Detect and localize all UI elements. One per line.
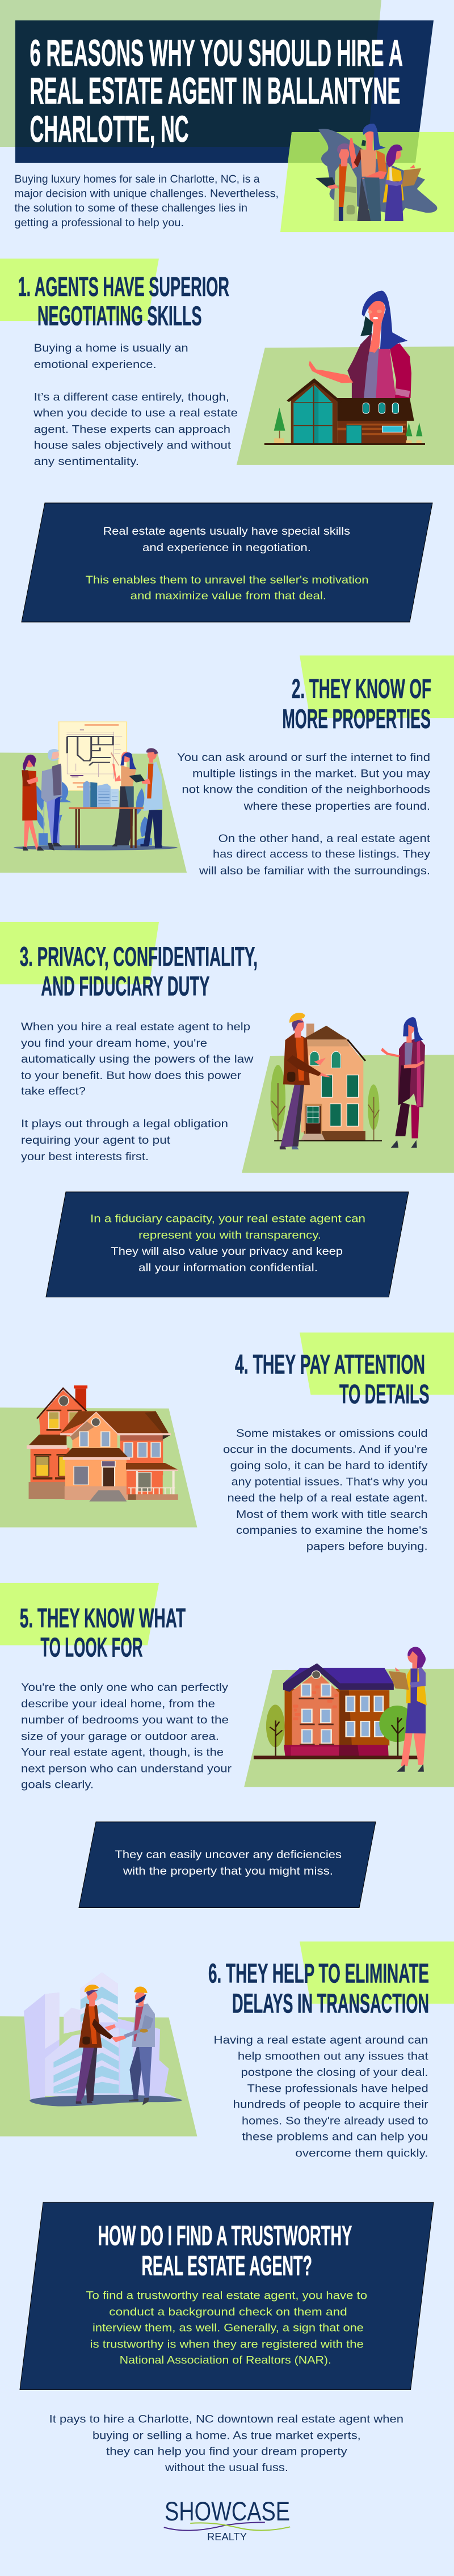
blueprint poster	[59, 722, 127, 790]
callout: section 3: represent you with transparency.	[138, 1229, 321, 1242]
panel: section 6 heading tab	[300, 1941, 454, 2004]
text block: section 3: It plays out through a legal obligation	[21, 1118, 228, 1130]
text block: section 4: Most of them work with title search	[236, 1508, 428, 1521]
callout: section 1: and maximize value from that deal.	[131, 590, 326, 602]
callout: section 5: with the property that you might miss.	[123, 1865, 333, 1877]
text block: section 3: take effect?	[21, 1085, 86, 1098]
illustration: agent with house, section 1	[237, 291, 454, 465]
text block: section 4: going solo, it can be hard to identify	[230, 1460, 428, 1472]
left man	[76, 1985, 116, 2104]
text block: section 2: On the other hand, a real estate agent	[218, 832, 431, 845]
illustration: team reviewing blueprint	[0, 722, 187, 873]
text block: final answer: To find a trustworthy real estate agent, you have to	[86, 2290, 367, 2302]
text block: closing	[49, 2413, 403, 2474]
logo: Showcase Realty: REALTY	[207, 2531, 247, 2543]
text block: closing: It pays to hire a Charlotte, NC downtown real estate agent when	[49, 2413, 403, 2425]
panel: section 3 heading tab	[0, 922, 159, 984]
text block: closing: buying or selling a home. As true market experts,	[93, 2429, 361, 2442]
text block: section 2	[177, 751, 431, 877]
text block: section 4: any potential issues. That's why you	[232, 1476, 428, 1488]
text block: section 6: overcome them quickly.	[295, 2147, 428, 2160]
text block: section 2: multiple listings in the market. But you may	[192, 768, 430, 780]
text block: intro: Buying luxury homes for sale in Charlotte, NC, is a	[15, 173, 260, 185]
text block: section 6: Having a real estate agent around can	[213, 2034, 428, 2046]
heading: section 2	[282, 674, 431, 734]
text block: section 2: where these properties are found.	[243, 800, 430, 813]
text block: section 2: has direct access to these listings. They	[213, 848, 430, 861]
text block: section 6: postpone the closing of your deal.	[241, 2066, 428, 2079]
man	[280, 1013, 331, 1149]
text block: final answer	[86, 2290, 367, 2366]
text block: section 5: goals clearly.	[21, 1778, 94, 1791]
text block: section 1: It’s a different case entirely, though,	[34, 391, 229, 404]
text block: section 1: house sales objectively and without	[34, 439, 232, 452]
text block: section 5: size of your garage or outdoor area.	[21, 1730, 219, 1742]
text block: section 3: you find your dream home, you're	[21, 1037, 207, 1050]
text block: section 1: Buying a home is usually an	[34, 342, 188, 354]
callout: section 5	[79, 1822, 376, 1907]
woman	[381, 1017, 425, 1148]
man in lab coat	[129, 748, 163, 848]
callout: section 1: Real estate agents usually have special skills	[103, 525, 350, 538]
text block: section 3: automatically using the powers of the law	[21, 1053, 254, 1065]
right woman	[382, 145, 421, 221]
heading: how do I find a trustworthy agent	[98, 2221, 352, 2282]
text block: section 1: emotional experience.	[34, 358, 157, 371]
text block: intro	[15, 173, 279, 229]
text block: section 6: homes. So they're already used to	[242, 2115, 428, 2127]
woman	[389, 1647, 427, 1772]
heading: section 5	[20, 1604, 186, 1663]
text block: intro: major decision with unique challenges. Nevertheless,	[15, 187, 279, 200]
left woman	[316, 138, 358, 221]
text block: section 1: agent. These experts can approach	[34, 423, 230, 435]
model buildings	[83, 781, 119, 807]
illustration: agent, client and house, section 3	[242, 1013, 454, 1173]
text block: final answer: National Association of Realtors (NAR).	[120, 2354, 331, 2366]
house	[274, 1023, 382, 1141]
right man	[111, 1987, 155, 2105]
text block: section 3: requiring your agent to put	[21, 1134, 171, 1147]
text block: section 3: your best interests first.	[21, 1150, 149, 1163]
left tree	[266, 1704, 285, 1756]
callout: section 1: This enables them to unravel the seller's motivation	[85, 574, 369, 586]
text block: section 5: number of bedrooms you want to the	[21, 1714, 229, 1726]
heading: section 3	[20, 942, 258, 1002]
text block: section 5: next person who can understand your	[21, 1762, 232, 1775]
panel: section 4 heading tab	[300, 1333, 454, 1395]
trees	[271, 1065, 379, 1140]
woman with pointer	[111, 752, 137, 847]
text block: section 3: to your benefit. But how does this power	[21, 1069, 242, 1082]
text block: intro: the solution to some of these challenges lies in	[15, 202, 247, 214]
callout: section 1	[22, 503, 432, 622]
text block: closing: without the usual fuss.	[165, 2461, 288, 2474]
illustration: three agents	[316, 124, 437, 221]
table	[69, 807, 144, 848]
text block: section 1: when you decide to use a real estate	[33, 407, 238, 419]
text block: section 1	[33, 342, 238, 468]
woman	[309, 291, 411, 399]
text block: section 6: These professionals have helped	[247, 2083, 428, 2095]
title	[30, 32, 403, 150]
text block: section 3: When you hire a real estate agent to help	[21, 1021, 250, 1033]
text block: section 2: You can ask around or surf the internet to find	[177, 751, 430, 764]
heading: section 3: AND FIDUCIARY DUTY	[41, 972, 209, 1002]
heading: section 1: 1. AGENTS HAVE SUPERIOR	[18, 272, 229, 302]
heading: section 4	[235, 1350, 430, 1410]
text block: final answer: is trustworthy is when they are registered with the	[90, 2338, 364, 2351]
text block: section 5: You're the only one who can perfectly	[21, 1681, 228, 1694]
text block: closing: they can help you find your dream property	[106, 2446, 347, 2458]
house	[264, 378, 425, 445]
text block: section 6: these problems and can help you	[242, 2131, 428, 2143]
callout: section 3	[46, 1192, 409, 1297]
panel: section 5 heading tab	[0, 1583, 159, 1646]
text block: section 4: papers before buying.	[306, 1541, 428, 1553]
panel: section 2 heading tab	[300, 655, 454, 718]
text block: section 5: Your real estate agent, though, is the	[21, 1746, 224, 1758]
middle woman	[354, 124, 387, 221]
text block: section 6: hundreds of people to acquire their	[233, 2099, 428, 2111]
callout: section 3: all your information confidential.	[138, 1262, 318, 1274]
illustration: handshake with buildings, section 6	[0, 1972, 197, 2137]
text block: section 5: describe your ideal home, from the	[21, 1698, 215, 1710]
callout: section 1: and experience in negotiation.	[142, 542, 311, 554]
logo: Showcase Realty	[164, 2496, 290, 2543]
text block: section 4: Some mistakes or omissions could	[236, 1427, 428, 1440]
text block: section 4: occur in the documents. And if you're	[223, 1444, 428, 1456]
plants	[34, 781, 152, 845]
text block: intro: getting a professional to help you.	[15, 217, 184, 229]
woman in red	[22, 755, 44, 851]
text block: final answer: interview them, as well. Generally, a sign that one	[93, 2321, 364, 2334]
brick house	[283, 1663, 394, 1756]
heading: section 3: 3. PRIVACY, CONFIDENTIALITY,	[20, 942, 258, 972]
panel: final question callout	[20, 2202, 434, 2389]
text block: section 3	[21, 1021, 254, 1163]
callout: section 3: They will also value your privacy and keep	[111, 1245, 343, 1258]
panel: header shapes	[0, 0, 454, 232]
panel: section 1 heading tab	[0, 259, 159, 321]
right tree	[379, 1706, 415, 1756]
text block: section 4	[223, 1427, 428, 1553]
heading: section 1: NEGOTIATING SKILLS	[37, 302, 202, 332]
text block: final answer: conduct a background check on them and	[109, 2306, 347, 2318]
callout: section 5: They can easily uncover any deficiencies	[115, 1849, 342, 1861]
text block: section 4: companies to examine the home's	[236, 1524, 428, 1537]
illustration: agent with clipboard and brick house, section 5	[244, 1647, 454, 1787]
text block: section 6: help smoothen out any issues that	[238, 2050, 428, 2063]
illustration: orange house, section 4	[0, 1385, 197, 1528]
text block: section 5	[21, 1681, 232, 1791]
title: CHARLOTTE, NC	[30, 108, 188, 150]
text block: section 2: will also be familiar with the surroundings.	[199, 865, 430, 877]
heading: section 5: 5. THEY KNOW WHAT	[20, 1604, 186, 1634]
text block: section 1: any sentimentality.	[34, 455, 139, 468]
buildings	[24, 1972, 176, 2100]
heading: how do I find a trustworthy agent: REAL ESTATE AGENT?	[142, 2251, 312, 2282]
text block: section 4: need the help of a real estate agent.	[227, 1492, 428, 1504]
callout: section 3: In a fiduciary capacity, your real estate agent can	[90, 1213, 365, 1225]
heading: section 5: TO LOOK FOR	[40, 1632, 143, 1663]
heading: section 1	[18, 272, 229, 332]
text block: section 6	[213, 2034, 428, 2160]
text block: section 2: not know the condition of the neighborhoods	[182, 784, 430, 796]
old man	[41, 749, 62, 851]
logo: Showcase Realty: SHOWCASE	[165, 2496, 290, 2526]
heading: section 6	[208, 1959, 429, 2019]
